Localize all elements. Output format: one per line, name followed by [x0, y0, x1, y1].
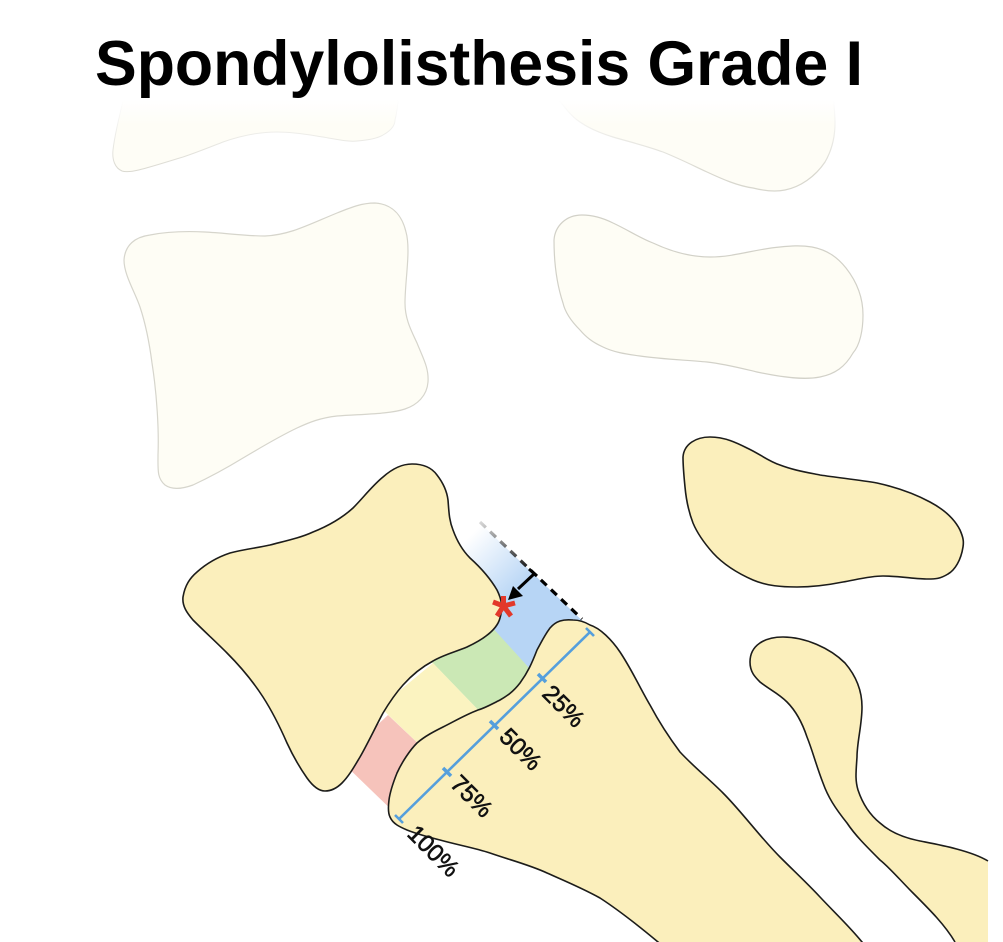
arrow: displacement — [508, 569, 537, 600]
faded spinous process: middle right — [554, 215, 863, 378]
faded vertebra: top left fragment — [113, 96, 398, 172]
label: 50%: 50% — [494, 723, 547, 776]
sacrum — [388, 620, 870, 942]
title: Spondylolisthesis Grade I — [95, 29, 863, 99]
band: pale yellow 50-75% — [380, 663, 484, 750]
faded vertebra: middle body — [124, 203, 428, 488]
spinous process: lower right upper — [683, 437, 963, 587]
label: 100%: 100% — [402, 820, 464, 883]
colored slip zone bands — [340, 521, 590, 820]
faded vertebra: top right fragment — [556, 96, 835, 191]
band: green 25-50% — [425, 625, 540, 716]
spinous process: lower right sacral — [750, 637, 988, 942]
icon: red asterisk — [493, 596, 515, 616]
band: blue 0-25% — [445, 521, 590, 682]
blue measuring scale — [395, 628, 594, 823]
label: 25%: 25% — [537, 680, 590, 733]
dashed reference line — [480, 522, 582, 619]
label: 75%: 75% — [445, 770, 498, 823]
upper vertebra L5 — [183, 464, 502, 791]
percentage labels — [402, 680, 590, 883]
band: red 75-100% — [340, 715, 425, 820]
